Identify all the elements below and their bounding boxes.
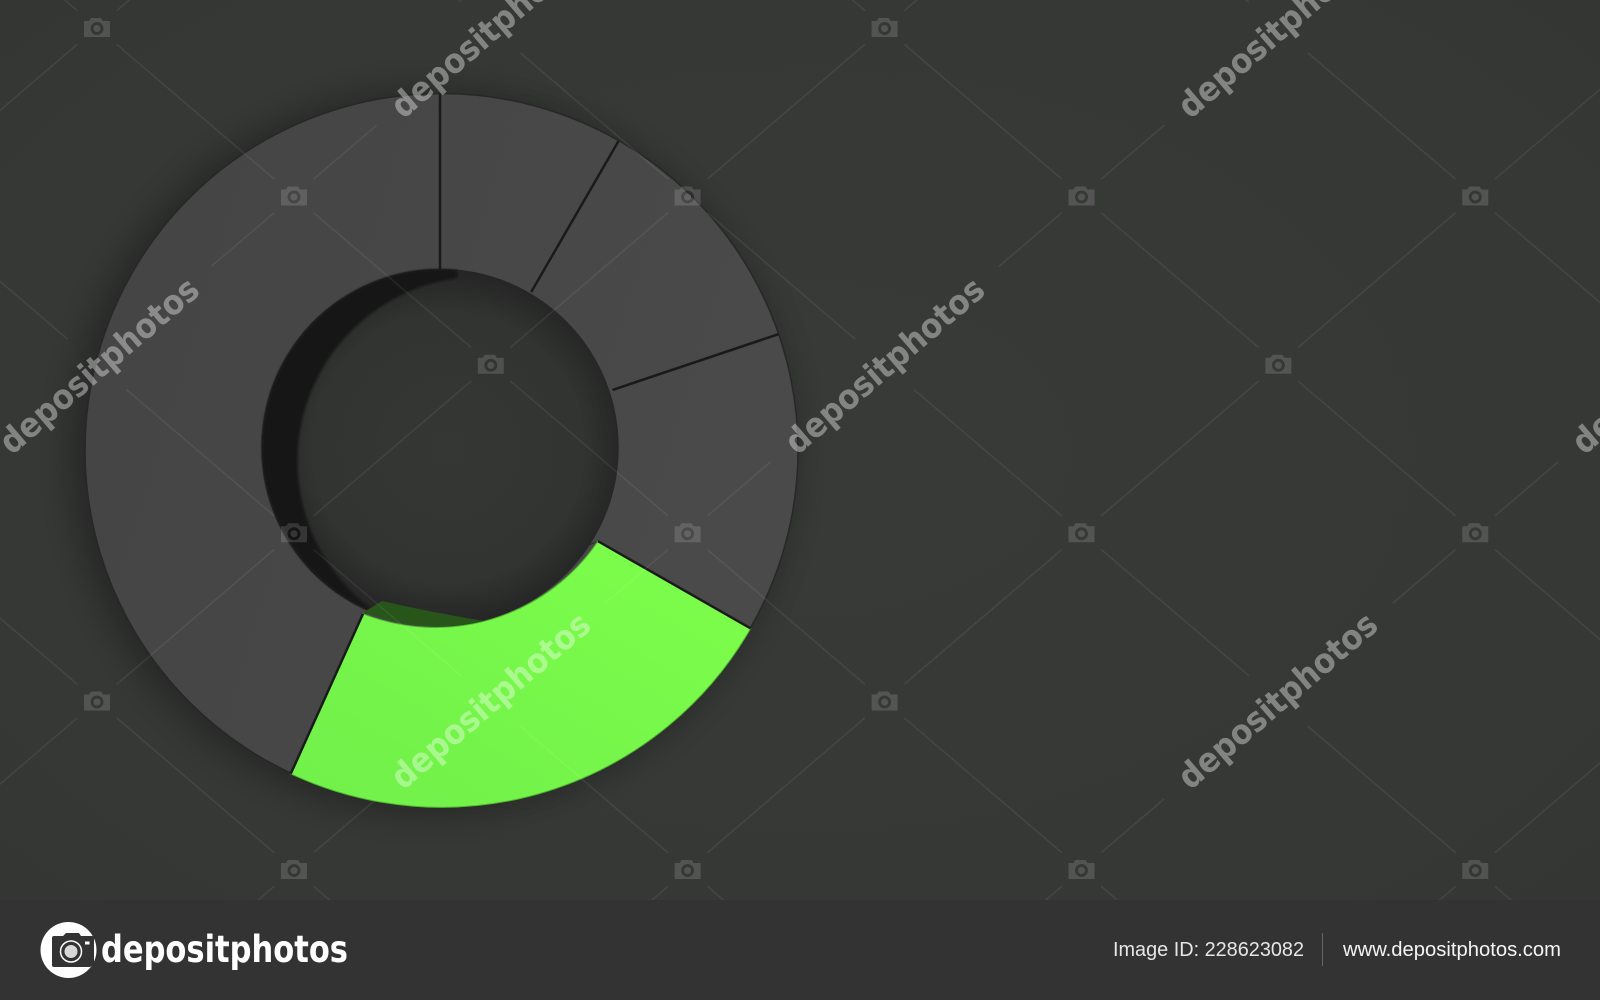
donut chart [70, 90, 798, 814]
image id: Image ID: 228623082 [1113, 939, 1304, 961]
icon: camera logo [40, 922, 96, 978]
hole floor [262, 270, 618, 626]
watermark camera icons [84, 18, 1488, 879]
footer divider [1322, 933, 1323, 966]
green wall reflection [364, 601, 484, 626]
ring drop shadow [70, 90, 794, 814]
website url: www.depositphotos.com [1342, 939, 1561, 961]
diagonal watermarks: depositphotos [1170, 604, 1386, 798]
hole patch behind green inner edge [363, 541, 598, 614]
diagonal watermarks [0, 0, 1600, 798]
ring: grey segments [85, 94, 798, 806]
diagonal watermarks: depositphotos [383, 604, 599, 798]
green segment [291, 541, 751, 807]
diagonal watermarks: depositphotos [777, 269, 993, 463]
footer bar [0, 900, 1600, 1000]
logo wordmark: depositphotos [101, 928, 348, 971]
segment dividers [291, 94, 778, 774]
hole shadow crescent [262, 269, 457, 614]
